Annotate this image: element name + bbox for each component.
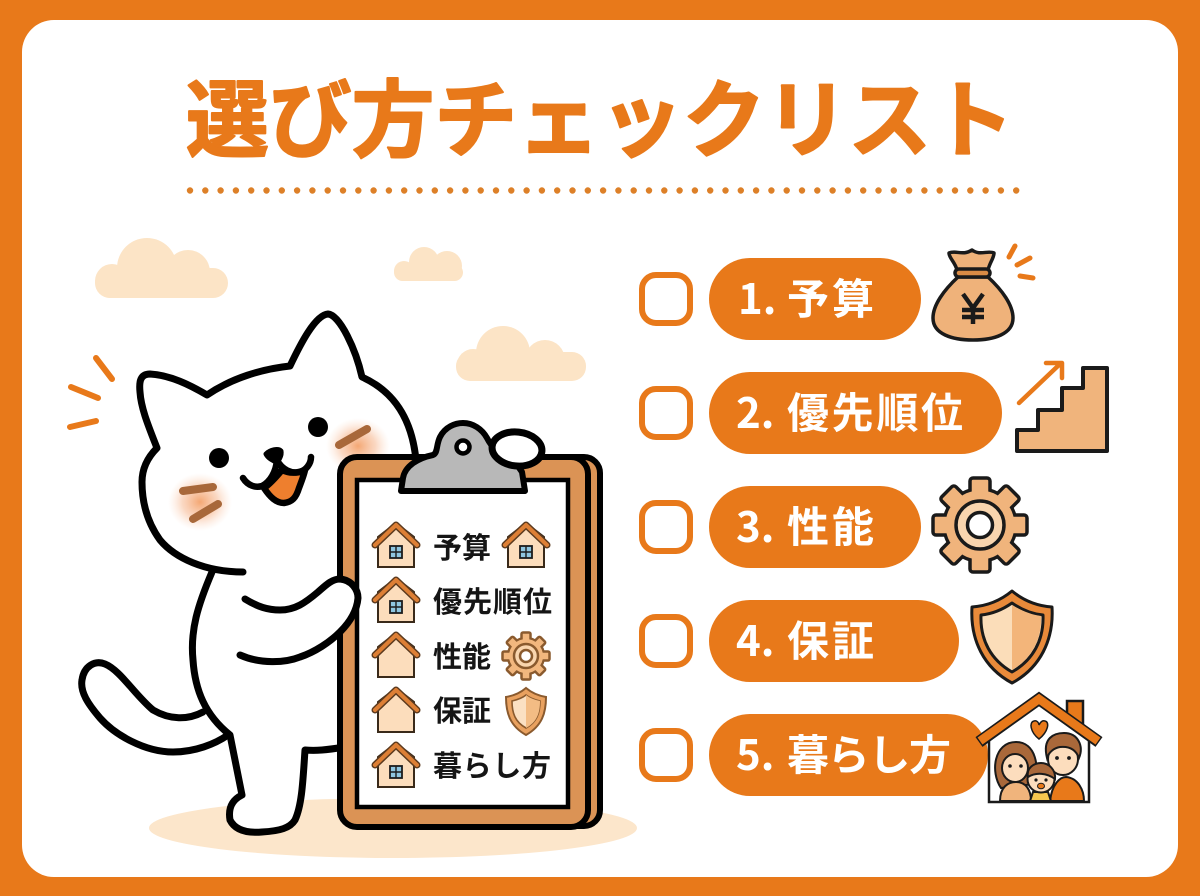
cat paw on clip [490,429,544,469]
label: 予算 [433,525,491,567]
clip hole [456,440,470,454]
cloud 3 [456,326,586,381]
pill 2 label: 優先順位 [787,380,963,441]
label: 保証 [433,688,491,730]
icon: house [375,633,417,677]
pill 5 label: 5. [736,722,774,783]
icon: family house [979,699,1099,802]
board front [340,457,588,827]
icon: house with window right [505,523,547,567]
sparks: money bag [1009,246,1033,278]
roof [979,699,1099,742]
woman [995,742,1037,801]
pill 4 label: 保証 [787,608,874,669]
cat illustration [82,314,416,832]
cat blush right [326,418,390,474]
child [1028,763,1055,801]
pill 5 [709,714,988,796]
title: 選び方チェックリスト [186,54,1014,175]
icon: house with window [375,743,417,787]
row 4 [375,688,546,735]
item 3 [642,486,921,568]
man [1046,733,1084,801]
cat mouth [243,450,311,503]
pill 1 label: 1. [738,266,776,327]
pill 3 label: 性能 [787,494,874,555]
cat body [192,570,345,832]
checkbox 2 [642,389,690,437]
pill 2 [709,372,1002,454]
cat head [140,314,416,572]
house wall [989,702,1089,802]
cloud 1 [95,238,228,298]
ground shadow [149,798,637,858]
icon: stairs with arrow [1017,363,1107,451]
pill 2 label: 2. [736,380,774,441]
cat eyes [209,417,328,468]
checkbox 1 [642,275,690,323]
item 2 [642,372,1002,454]
checklist rows [375,523,552,787]
cloud 2 [394,247,463,281]
pill 3 [709,486,921,568]
label: 性能 [433,634,491,676]
label: 暮らし方 [433,743,551,785]
row 5 [375,743,551,787]
heart [1031,721,1048,739]
cat whisker marks [183,429,367,519]
cat arm [225,579,358,662]
pill 3 label: 3. [736,494,774,555]
clipboard [340,423,600,827]
checkbox 5 [642,731,690,779]
icon: house with window [375,578,417,622]
clip [401,423,525,491]
item 4 [642,600,959,682]
icon: gear [933,478,1027,572]
row 1 [375,523,547,567]
pill 5 label: 暮らし方 [787,722,951,783]
board back [540,457,600,826]
icon: house [375,688,417,732]
small shield [506,688,546,735]
item 5 [642,714,988,796]
label: 優先順位 [433,579,552,621]
clouds [95,238,586,381]
cat blush left [168,473,232,531]
pill 1 [709,258,921,340]
icon: money bag [933,250,1013,340]
pill 4 label: 4. [736,608,774,669]
icon: house with window [375,523,417,567]
cat tail [82,663,228,752]
row 2 [375,578,552,622]
small gear [502,632,550,680]
pill 1 label: 予算 [787,266,874,327]
pill 4 [709,600,959,682]
icon: shield [972,591,1052,683]
checkbox 3 [642,503,690,551]
faces [1008,756,1071,782]
paper [357,480,568,807]
chimney [1067,701,1083,729]
row 3 [375,632,550,680]
item 1 [642,258,921,340]
spark lines [70,358,112,427]
checkbox 4 [642,617,690,665]
